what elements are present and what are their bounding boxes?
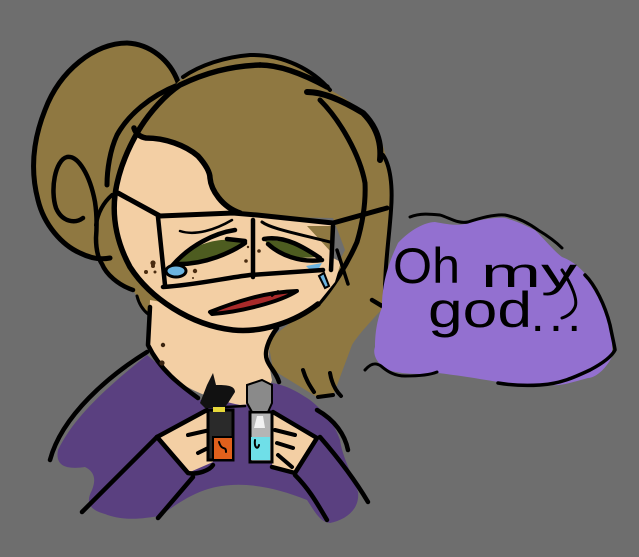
neck xyxy=(148,300,279,407)
speech text: god xyxy=(428,282,532,338)
speech text xyxy=(393,238,579,339)
hair back fall xyxy=(140,55,396,397)
speech text: Oh xyxy=(393,238,460,294)
mouth xyxy=(210,291,297,314)
hair bun xyxy=(34,43,178,314)
speech text: ... xyxy=(533,301,579,339)
eyes xyxy=(172,220,330,266)
tears xyxy=(166,263,329,288)
glasses xyxy=(118,193,387,287)
shirt xyxy=(50,352,368,523)
speech bubble xyxy=(365,214,615,385)
hands xyxy=(157,410,317,473)
speech text: my xyxy=(481,249,577,296)
vial: grey and cyan xyxy=(247,380,272,462)
vial: black and orange xyxy=(200,373,235,460)
face xyxy=(114,128,341,330)
freckles xyxy=(144,246,261,279)
